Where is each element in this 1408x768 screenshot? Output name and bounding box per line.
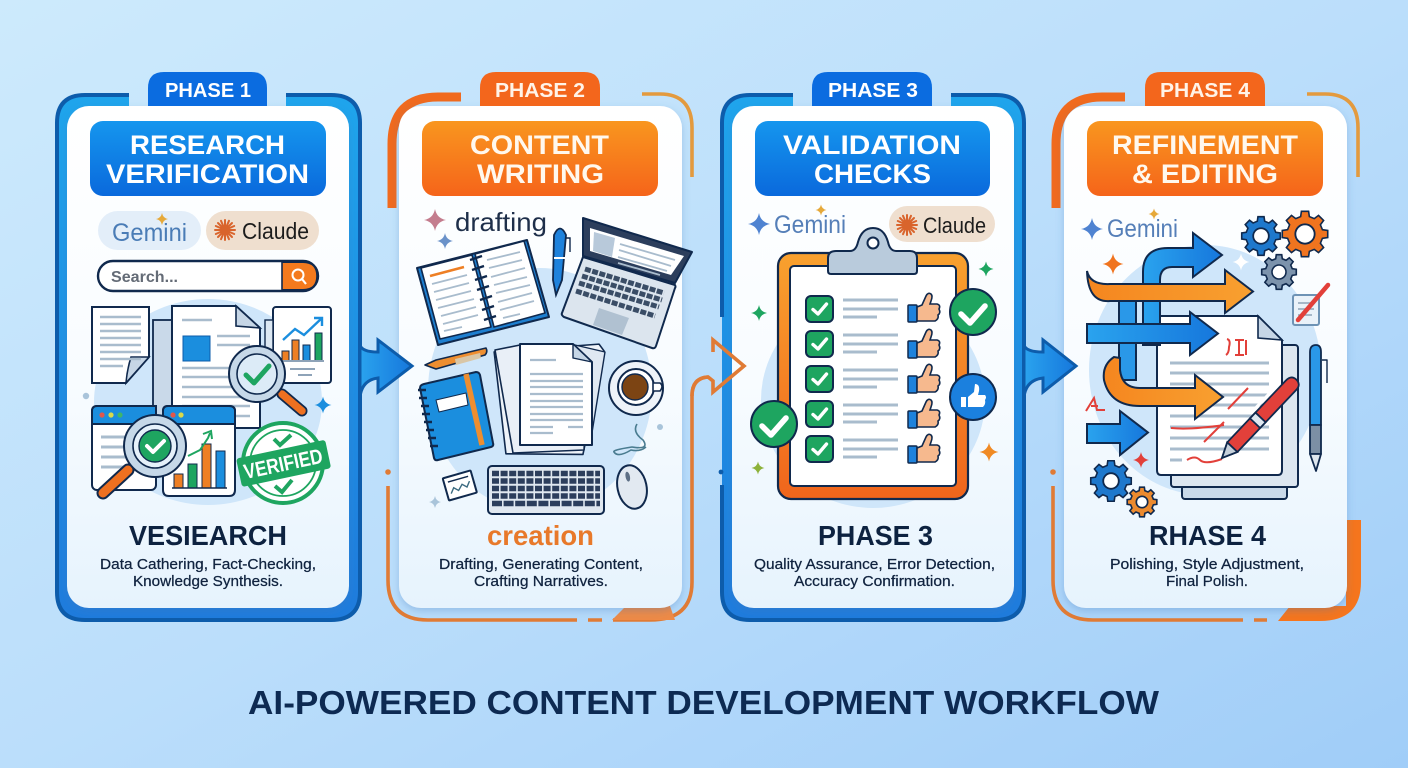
title banner	[90, 121, 326, 196]
gears bottom	[1091, 461, 1157, 517]
title banner: RESEARCH	[130, 130, 285, 160]
Claude pill	[889, 206, 995, 242]
magnifier large	[103, 415, 186, 493]
blue pen	[1310, 345, 1327, 471]
steam squiggle	[614, 424, 646, 455]
small chart card	[443, 470, 477, 501]
panel: phase 1 research	[57, 72, 360, 620]
small pen	[425, 348, 487, 369]
phase 1 description: Knowledge Synthesis.	[133, 574, 283, 590]
Gemini logo: Gemini	[774, 211, 846, 239]
arrow: phase 2 to 3	[692, 340, 744, 396]
keyboard	[488, 466, 604, 514]
title banner: & EDITING	[1132, 159, 1278, 189]
phase 1 description: Data Cathering, Fact-Checking,	[100, 557, 316, 573]
green check badge	[950, 289, 996, 335]
Claude pill: Claude	[242, 218, 309, 244]
document left	[92, 307, 149, 383]
search bar	[98, 261, 318, 291]
panel 3 frame	[719, 95, 1024, 620]
panel 2 frame	[386, 94, 708, 620]
blue thumb badge	[950, 374, 996, 420]
panel 3 card	[732, 106, 1014, 608]
phase 1 heading: VESIEARCH	[129, 520, 287, 551]
phase 2 tab	[480, 72, 600, 106]
checklist	[806, 296, 898, 462]
title: AI-POWERED CONTENT DEVELOPMENT WORKFLOW	[248, 684, 1160, 721]
open notebook	[417, 240, 549, 345]
laptop	[562, 218, 692, 348]
sparkle	[429, 496, 441, 508]
clipboard clip	[828, 228, 917, 274]
Gemini logo	[1081, 208, 1178, 243]
dot	[657, 424, 663, 430]
Gemini logo: Gemini	[1107, 215, 1178, 243]
illustration backdrop	[428, 268, 652, 512]
panel: phase 3 validation	[719, 72, 1024, 620]
phase 2 description	[439, 557, 643, 590]
drafting label: drafting	[455, 207, 547, 237]
phase 4 description: Polishing, Style Adjustment,	[1110, 557, 1304, 573]
panel 1 card	[67, 106, 349, 608]
title banner: CHECKS	[814, 159, 931, 189]
phase 4 tab: PHASE 4	[1160, 80, 1251, 102]
coffee cup	[609, 361, 663, 415]
frame wedge	[1278, 520, 1361, 621]
phase 2 tab: PHASE 2	[495, 80, 585, 102]
verified stamp	[236, 423, 331, 503]
browser window chart	[163, 406, 235, 496]
Gemini pill: Gemini	[112, 219, 187, 247]
arrow: phase 1 to 2	[360, 340, 412, 397]
magnifier small	[229, 346, 302, 411]
title banner	[1087, 121, 1323, 196]
illustration backdrop	[1089, 245, 1321, 495]
phase 3 tab	[812, 72, 932, 106]
workflow arrows	[1087, 233, 1253, 455]
Claude pill	[206, 211, 319, 250]
sparkles	[751, 262, 998, 474]
clipboard hole	[868, 238, 878, 248]
browser window left	[92, 406, 156, 490]
pen	[553, 228, 570, 295]
spiral notebook	[418, 372, 493, 460]
arrow: phase 3 to 4	[1024, 340, 1076, 397]
phase 2 description: Crafting Narratives.	[474, 574, 608, 590]
panel: phase 4 refinement	[1051, 72, 1361, 621]
phase 1 tab: PHASE 1	[165, 80, 251, 102]
illustration backdrop	[94, 299, 322, 505]
title banner: REFINEMENT	[1112, 130, 1299, 160]
panel: phase 2 content	[386, 72, 708, 620]
phase 3 description	[754, 557, 995, 590]
phase 4 tab	[1145, 72, 1265, 106]
title banner: VALIDATION	[783, 130, 961, 160]
red pen	[1215, 373, 1301, 463]
phase 3 heading: PHASE 3	[818, 520, 933, 551]
phase 3 description: Quality Assurance, Error Detection,	[754, 557, 995, 573]
red edit marks	[1086, 339, 1248, 462]
phase 4 heading: RHASE 4	[1149, 520, 1266, 551]
thumbs up column	[908, 293, 940, 463]
phase 3 description: Accuracy Confirmation.	[794, 574, 955, 590]
phase 1 tab	[148, 72, 267, 106]
gears top	[1242, 211, 1328, 289]
title banner	[422, 121, 658, 196]
title banner: CONTENT	[470, 130, 610, 160]
verified stamp: VERIFIED	[242, 445, 325, 484]
title banner	[755, 121, 990, 196]
illustration backdrop	[761, 292, 985, 508]
search bar: Search...	[111, 269, 178, 286]
phase 1 description	[100, 557, 316, 590]
panel 4 frame	[1051, 94, 1358, 620]
Gemini logo	[748, 204, 846, 239]
paper stack	[494, 344, 606, 456]
panel 2 card	[399, 106, 682, 608]
panel 4 card	[1064, 106, 1347, 608]
phase 4 description: Final Polish.	[1166, 574, 1248, 590]
Gemini pill	[98, 211, 201, 250]
green check badge left	[751, 401, 797, 447]
sparkles	[1102, 254, 1250, 468]
sparkle	[314, 396, 332, 414]
clipboard	[778, 228, 968, 499]
dot	[83, 393, 89, 399]
document stack	[1157, 316, 1298, 499]
phase 2 heading: creation	[487, 520, 594, 551]
drafting label	[424, 207, 547, 249]
chart document	[265, 307, 331, 383]
small edit document	[1293, 285, 1328, 325]
panel 1 frame	[57, 95, 360, 620]
phase 3 tab: PHASE 3	[828, 80, 918, 102]
frame wedge	[612, 606, 675, 620]
Claude pill: Claude	[923, 213, 986, 238]
phase 4 description	[1110, 557, 1304, 590]
document stack	[153, 306, 260, 428]
phase 2 description: Drafting, Generating Content,	[439, 557, 643, 573]
title banner: VERIFICATION	[106, 159, 309, 189]
title banner: WRITING	[477, 159, 604, 189]
mouse	[613, 462, 651, 512]
